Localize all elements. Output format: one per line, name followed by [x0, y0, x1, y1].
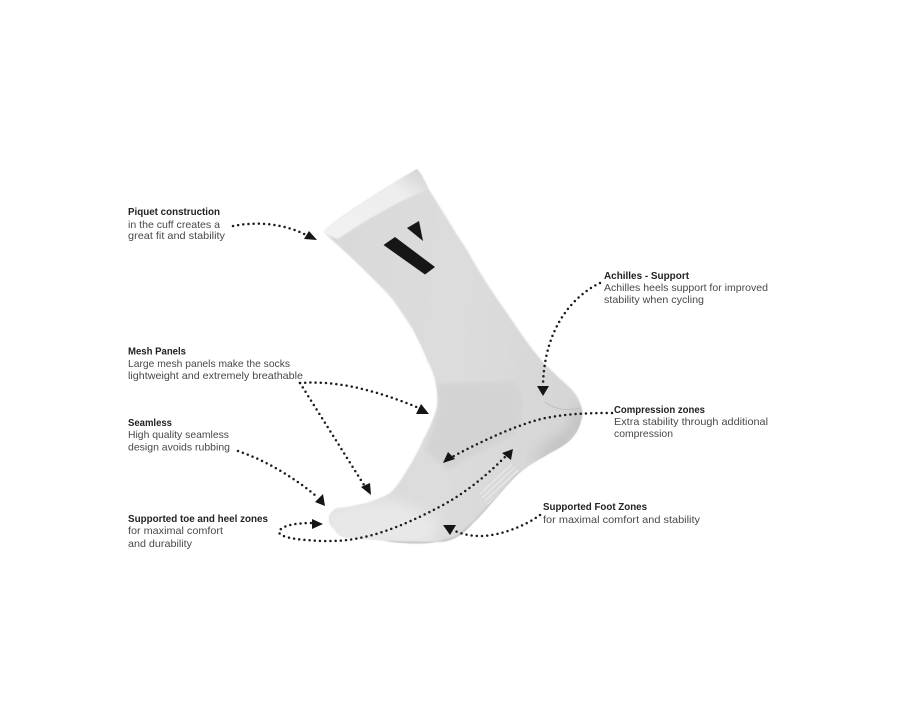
- arrow: achilles: [537, 283, 600, 396]
- sock body: [324, 169, 583, 544]
- logo triangle: [407, 221, 423, 241]
- text: mesh panels: lightweight and extremely breathable: [128, 370, 303, 382]
- text: piquet construction: great fit and stability: [128, 230, 226, 242]
- arrow: mesh to foot: [300, 383, 371, 495]
- text: piquet construction: Piquet construction: [128, 206, 220, 218]
- sole ribs: [480, 464, 518, 504]
- text: achilles support: stability when cycling: [604, 294, 704, 306]
- text: supported toe and heel zones: and durability: [128, 538, 193, 550]
- text: compression zones: compression: [614, 428, 673, 440]
- text: supported foot zones: Supported Foot Zones: [543, 501, 647, 513]
- text: seamless: High quality seamless: [128, 429, 229, 441]
- arrow: supported foot: [443, 515, 540, 536]
- text: mesh panels: [128, 346, 303, 382]
- heel seam line: [545, 402, 580, 410]
- text: achilles support: Achilles - Support: [604, 270, 689, 282]
- text: mesh panels: Large mesh panels make the socks: [128, 358, 290, 370]
- sole shadow: [380, 453, 550, 543]
- arrow: toe and heel loop with foot line: [279, 449, 513, 541]
- text: seamless: design avoids rubbing: [128, 442, 230, 454]
- heel shadow: [538, 404, 582, 459]
- text: seamless: Seamless: [128, 417, 172, 429]
- text: achilles support: Achilles heels support for improved: [604, 282, 768, 294]
- text: compression zones: [614, 404, 768, 440]
- text: piquet construction: in the cuff creates a: [128, 219, 220, 231]
- arrow: seamless: [238, 451, 325, 506]
- sock illustration: [322, 168, 590, 548]
- text: compression zones: Compression zones: [614, 404, 705, 416]
- arrow: mesh to panel: [300, 383, 429, 414]
- arrow: compression: [443, 413, 612, 463]
- mesh panel shape: [429, 386, 462, 466]
- logo bar: [384, 237, 435, 274]
- text: mesh panels: Mesh Panels: [128, 346, 186, 358]
- text: compression zones: Extra stability through additional: [614, 416, 768, 428]
- text: supported toe and heel zones: for maximal comfort: [128, 525, 223, 537]
- cuff band: [322, 168, 429, 239]
- text: supported toe and heel zones: Supported toe and heel zones: [128, 513, 268, 525]
- sock shading: [322, 168, 590, 548]
- text: piquet construction: [128, 206, 226, 242]
- arrow: piquet: [233, 224, 317, 240]
- text: seamless: [128, 417, 230, 454]
- text: supported toe and heel zones: [128, 513, 268, 550]
- text: achilles support: [604, 270, 768, 306]
- text: supported foot zones: [543, 501, 701, 526]
- toe area: [330, 502, 434, 541]
- text: supported foot zones: for maximal comfort and stability: [543, 514, 701, 526]
